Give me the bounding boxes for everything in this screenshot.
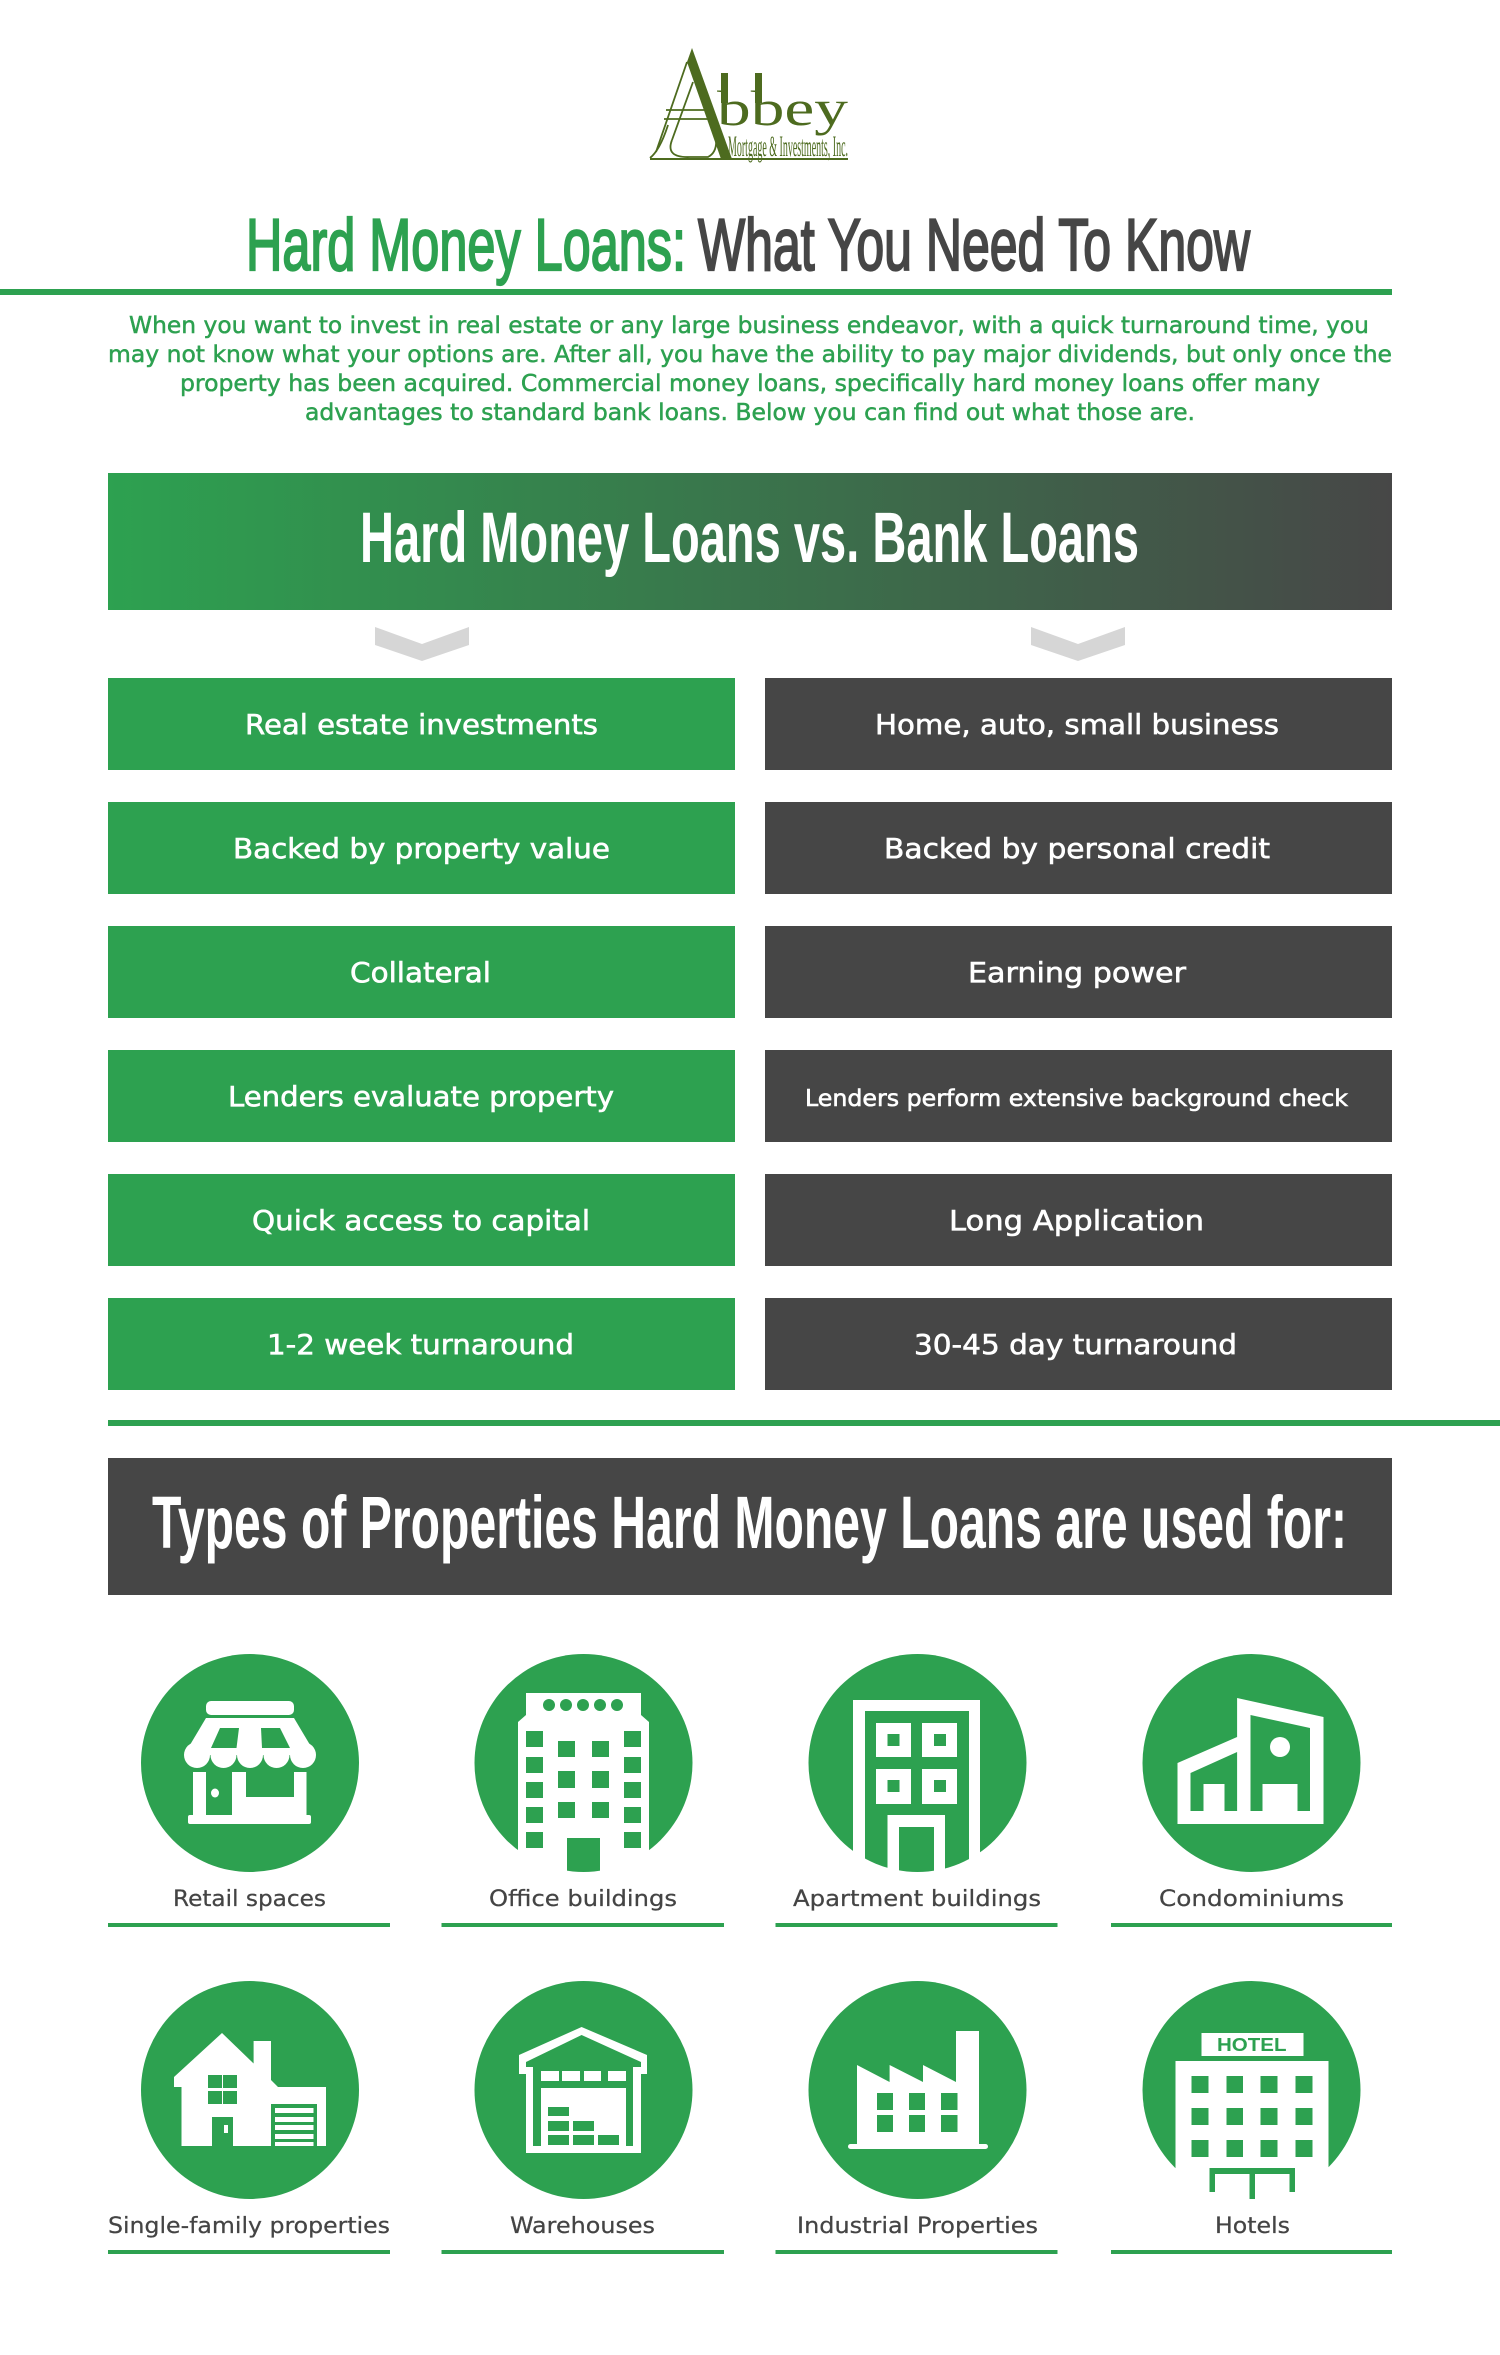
intro paragraph: When you want to invest in real estate or any large business endeavor, with a quick turnaround time, you [129, 311, 1369, 339]
property: retail spaces [108, 1654, 390, 1927]
title: What You Need To Know [698, 205, 1250, 286]
property: hotels: Hotels [1215, 2213, 1290, 2239]
icon: storefront [184, 1701, 316, 1824]
icon: apartment block [853, 1700, 980, 1880]
property: condominiums: Condominiums [1159, 1886, 1344, 1912]
row: bank loan uses [765, 678, 1392, 770]
intro paragraph: may not know what your options are. After all, you have the ability to pay major dividends, but only once the [108, 340, 1392, 368]
row: hard money backing [108, 802, 735, 894]
intro paragraph: advantages to standard bank loans. Below you can find out what those are. [305, 398, 1195, 426]
intro paragraph [108, 311, 1392, 426]
row: bank loan backing: Backed by personal credit [884, 832, 1270, 865]
title [246, 205, 1250, 286]
row: hard money evaluation: Lenders evaluate property [228, 1080, 614, 1113]
icon: warehouse [519, 2027, 647, 2153]
row: bank loan security: Earning power [968, 956, 1187, 989]
row: bank loan backing [765, 802, 1392, 894]
icon: condo building [1178, 1698, 1324, 1824]
row: bank loan evaluation [765, 1050, 1392, 1142]
property: apartment buildings: Apartment buildings [793, 1886, 1041, 1912]
row: hard money security: Collateral [350, 956, 491, 989]
property: office buildings: Office buildings [489, 1886, 677, 1912]
property: hotels [1111, 1981, 1392, 2254]
row: bank loan turnaround: 30-45 day turnaround [914, 1328, 1237, 1361]
property: office buildings [442, 1654, 724, 1927]
row: hard money uses: Real estate investments [245, 708, 598, 741]
comparison table [108, 678, 1392, 1390]
row: bank loan application [765, 1174, 1392, 1266]
row: bank loan security [765, 926, 1392, 1018]
row: hard money turnaround [108, 1298, 735, 1390]
logo: Abbey Mortgage & Investments: bbey [717, 80, 848, 136]
banner: Types of Properties [108, 1458, 1392, 1595]
logo: Abbey Mortgage & Investments [650, 48, 848, 163]
property: apartment buildings [776, 1654, 1058, 1927]
property: warehouses [442, 1981, 724, 2254]
row: bank loan evaluation: Lenders perform extensive background check [805, 1084, 1348, 1112]
title: Hard Money Loans: [246, 205, 686, 286]
property: retail spaces: Retail spaces [173, 1886, 326, 1912]
icon: hotel: HOTEL [1217, 2035, 1287, 2055]
icon: house [174, 2033, 326, 2146]
icon: hotel [1176, 2033, 1328, 2201]
icon: chevron right [1031, 627, 1125, 661]
row: hard money uses [108, 678, 735, 770]
text: Mortgage & Investments, Inc. [728, 130, 848, 163]
intro paragraph: property has been acquired. Commercial money loans, specifically hard money loans offer many [180, 369, 1320, 397]
row: hard money evaluation [108, 1050, 735, 1142]
row: bank loan application: Long Application [949, 1204, 1204, 1237]
icon: factory [848, 2031, 988, 2149]
property: single-family properties [108, 1981, 390, 2254]
row: hard money security [108, 926, 735, 1018]
row: hard money access [108, 1174, 735, 1266]
property: warehouses: Warehouses [510, 2213, 655, 2239]
row: hard money backing: Backed by property value [233, 832, 610, 865]
icon: chevron left [375, 627, 469, 661]
row: hard money access: Quick access to capital [252, 1204, 590, 1237]
row: bank loan turnaround [765, 1298, 1392, 1390]
banner: Hard Money Loans vs. Bank Loans [108, 473, 1392, 610]
row: hard money turnaround: 1-2 week turnaround [267, 1328, 574, 1361]
property: industrial properties: Industrial Properties [797, 2213, 1038, 2239]
property: single-family properties: Single-family properties [108, 2213, 390, 2239]
icon: office tower [518, 1693, 649, 1880]
row: bank loan uses: Home, auto, small business [875, 708, 1279, 741]
property: condominiums [1111, 1654, 1392, 1927]
property: industrial properties [776, 1981, 1058, 2254]
